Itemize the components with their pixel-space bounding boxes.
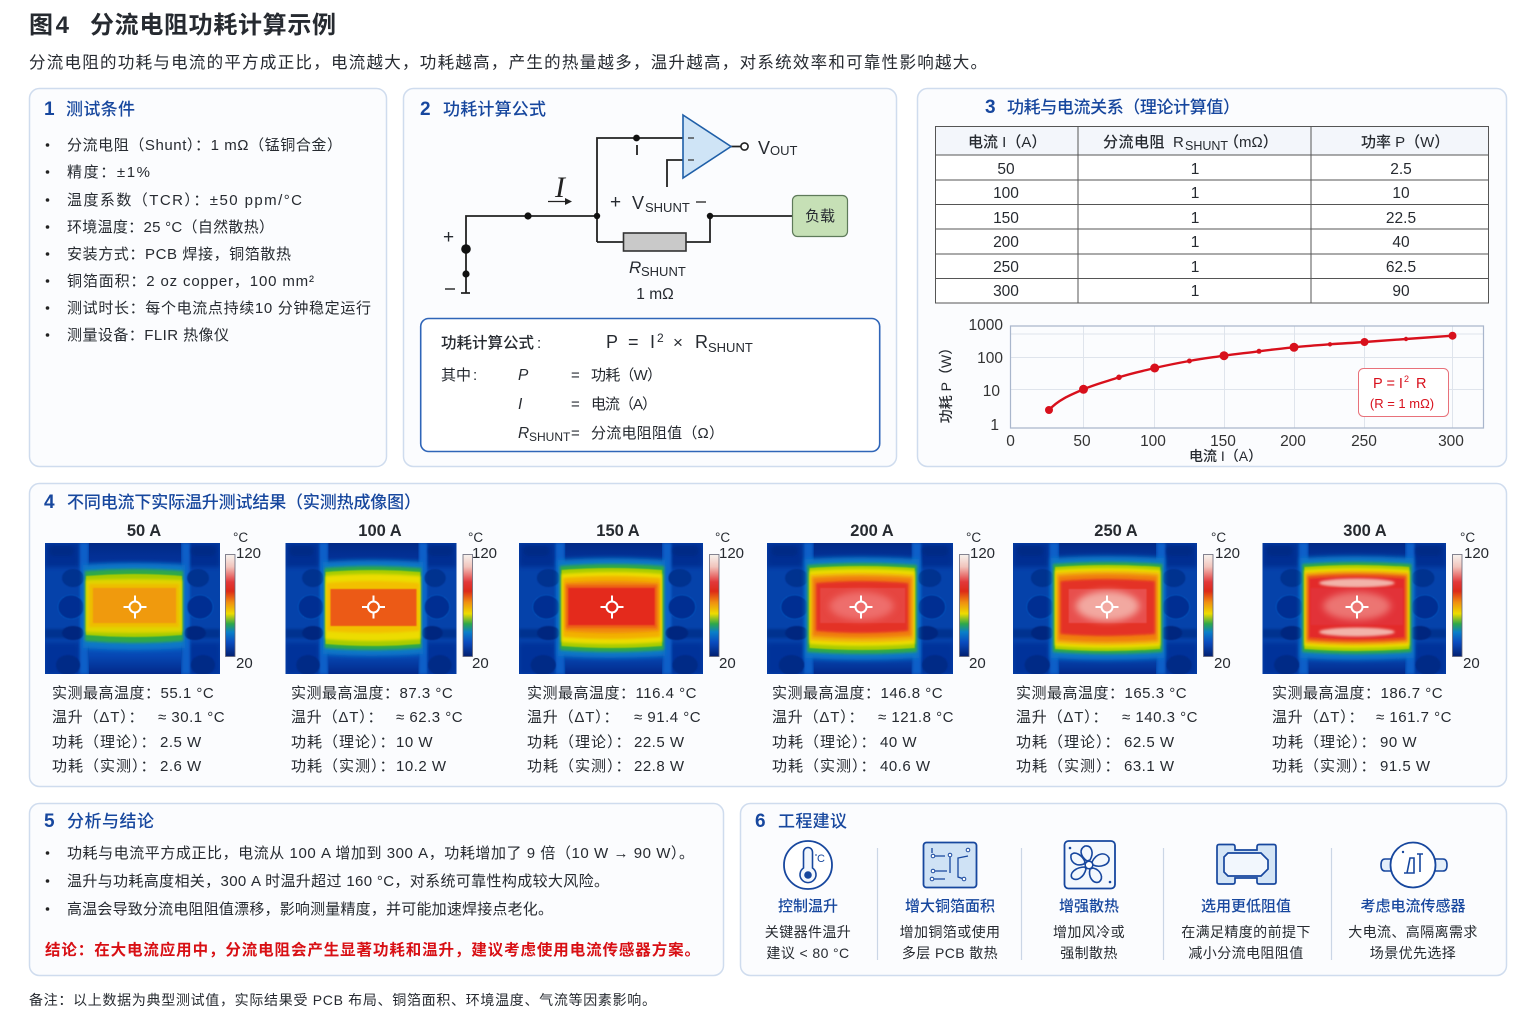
panel: thermal results xyxy=(30,484,1506,786)
voltage labels: OUT xyxy=(770,143,798,158)
title: 分流电阻功耗计算示例 xyxy=(90,12,336,39)
voltage labels: SHUNT xyxy=(645,200,690,215)
current arrow: I xyxy=(554,171,567,204)
thermal card: 200 A: 120 xyxy=(970,545,995,562)
thermal card: 150 A: 22.8 W xyxy=(634,758,685,775)
heading: analysis: 5 xyxy=(44,811,55,832)
formula box: × xyxy=(673,333,683,352)
thermal card: 200 A xyxy=(767,522,995,775)
thermal card: 100 A: 20 xyxy=(472,655,489,672)
advice: increase copper area: 增加铜箔或使用 xyxy=(900,924,1000,940)
thermal card: 150 A: ≈ 91.4 °C xyxy=(634,709,701,726)
panel: test conditions xyxy=(30,88,386,466)
thermal card: 150 A: 20 xyxy=(719,655,736,672)
data table: 1 xyxy=(1191,185,1199,202)
thermal card: 50 A: 温升（ΔT）： xyxy=(52,709,144,726)
data table: （mΩ） xyxy=(1224,134,1278,151)
thermal card: 250 A: 63.1 W xyxy=(1124,758,1175,775)
formula box: I xyxy=(650,332,655,352)
thermal card: 300 A: 温升（ΔT）： xyxy=(1272,709,1364,726)
data table: SHUNT xyxy=(1185,139,1228,153)
thermal card: 100 A: 10.2 W xyxy=(396,758,447,775)
advice: current sensor: 场景优先选择 xyxy=(1370,945,1456,961)
heading: thermal results: 4 xyxy=(44,492,55,513)
thermal card: 250 A: 功耗（理论）： xyxy=(1016,734,1120,751)
thermal card: 200 A: 20 xyxy=(969,655,986,672)
data table: 50 xyxy=(997,161,1015,178)
line chart: 0 xyxy=(1006,433,1015,450)
advice: increase copper area: 增大铜箔面积 xyxy=(905,897,995,915)
thermal card: 250 A: 250 A xyxy=(1094,522,1138,540)
formula box: SHUNT xyxy=(529,430,571,444)
advice: current sensor xyxy=(1348,842,1478,961)
data table: 150 xyxy=(993,210,1019,227)
footnote: 备注：以上数据为典型测试值，实际结果受 PCB 布局、铜箔面积、环境温度、气流等因素影响。 xyxy=(29,992,656,1008)
thermal card: 100 A: 功耗（理论）： xyxy=(291,734,395,751)
panel: power vs current xyxy=(918,88,1506,466)
thermal card: 200 A: ≈ 121.8 °C xyxy=(878,709,954,726)
formula box: 电流（A） xyxy=(591,396,657,413)
advice: enhance cooling: 强制散热 xyxy=(1060,945,1118,961)
load box xyxy=(792,196,848,236)
data table: 250 xyxy=(993,259,1019,276)
thermal card: 200 A: 200 A xyxy=(850,522,894,540)
advice: enhance cooling: 增加风冷或 xyxy=(1053,924,1125,940)
chart legend: R xyxy=(1416,376,1426,392)
thermal card: 250 A: 20 xyxy=(1214,655,1231,672)
data table: 40 xyxy=(1392,234,1410,251)
thermal card: 200 A: 温升（ΔT）： xyxy=(772,709,864,726)
thermal card: 200 A: °C xyxy=(966,530,981,545)
line chart: 200 xyxy=(1280,433,1306,450)
thermal card: 150 A: 实测最高温度：116.4 °C xyxy=(527,685,697,702)
thermal card: 250 A: 实测最高温度：165.3 °C xyxy=(1016,685,1187,702)
bullet list: test conditions: 测量设备：FLIR 热像仪 xyxy=(67,327,229,344)
thermal card: 300 A: 功耗（实测）： xyxy=(1272,758,1376,775)
thermal card: 300 A: 90 W xyxy=(1380,734,1417,751)
bullet list: test conditions: 安装方式：PCB 焊接，铜箔散热 xyxy=(67,246,291,263)
heading: thermal results: 不同电流下实际温升测试结果（实测热成像图） xyxy=(67,492,421,512)
thermal card: 250 A xyxy=(1013,522,1240,775)
advice: increase copper area xyxy=(900,842,1000,961)
data table: 1 xyxy=(1191,210,1199,227)
thermal card: 100 A: ≈ 62.3 °C xyxy=(396,709,463,726)
thermal card: 300 A: 20 xyxy=(1463,655,1480,672)
formula box: : xyxy=(537,335,541,352)
formula box: P xyxy=(606,332,618,352)
thermal card: 50 A xyxy=(45,522,261,775)
formula box: = xyxy=(571,367,580,384)
advice: current sensor: 大电流、高隔离需求 xyxy=(1348,924,1478,940)
thermal card: 200 A: 功耗（实测）： xyxy=(772,758,876,775)
heading: test conditions xyxy=(44,99,135,120)
advice: lower resistance: 选用更低阻值 xyxy=(1201,898,1291,915)
voltage labels: V xyxy=(758,138,770,158)
formula box: P xyxy=(518,367,529,384)
analysis bullets: 高温会导致分流电阻阻值漂移，影响测量精度，并可能加速焊接点老化。 xyxy=(67,901,553,918)
thermal card: 50 A: 功耗（理论）： xyxy=(52,734,156,751)
advice: control temperature: 建议 < 80 °C xyxy=(766,945,850,961)
load box: 负载 xyxy=(805,208,835,225)
thermal card: 300 A xyxy=(1262,522,1489,775)
formula box: 2 xyxy=(657,331,664,345)
formula box: 功耗计算公式 xyxy=(441,333,534,352)
chart legend: (R = 1 mΩ) xyxy=(1370,396,1434,411)
voltage labels xyxy=(443,138,798,289)
thermal card: 50 A: 实测最高温度：55.1 °C xyxy=(52,685,214,702)
analysis bullets: 温升与功耗高度相关，300 A 时温升超过 160 °C，对系统可靠性构成较大风险。 xyxy=(67,872,609,890)
advice: enhance cooling xyxy=(1053,841,1125,961)
subtitle text: 分流电阻的功耗与电流的平方成正比，电流越大，功耗越高，产生的热量越多，温升越高，对系统效率和可靠性影响越大。 xyxy=(29,53,987,72)
chart legend: 2 xyxy=(1404,374,1409,384)
thermal card: 100 A: 功耗（实测）： xyxy=(291,758,395,775)
advice: increase copper area: 多层 PCB 散热 xyxy=(902,945,998,961)
data table: 300 xyxy=(993,283,1019,300)
thermal card: 200 A: 实测最高温度：146.8 °C xyxy=(772,685,943,702)
formula box: 功耗（W） xyxy=(591,367,662,384)
advice: enhance cooling: 增强散热 xyxy=(1059,897,1119,915)
shunt labels: 1 mΩ xyxy=(636,286,674,303)
advice: lower resistance xyxy=(1181,844,1311,961)
line chart: 1000 xyxy=(969,317,1003,334)
data table: 电流 I（A） xyxy=(968,134,1046,151)
current arrow xyxy=(548,171,572,205)
panel: analysis and conclusion xyxy=(30,804,724,976)
thermal card: 100 A: 实测最高温度：87.3 °C xyxy=(291,685,453,702)
voltage labels: + xyxy=(610,192,621,213)
data table: 1 xyxy=(1191,259,1199,276)
op amp xyxy=(683,115,748,178)
advice: current sensor: 考虑电流传感器 xyxy=(1360,898,1466,915)
shunt labels: SHUNT xyxy=(641,264,686,279)
thermal card: 50 A: 120 xyxy=(236,545,261,562)
thermal card: 250 A: 温升（ΔT）： xyxy=(1016,709,1108,726)
thermal card: 100 A: 温升（ΔT）： xyxy=(291,709,383,726)
thermal card: 250 A: 120 xyxy=(1215,545,1240,562)
thermal card: 100 A: 100 A xyxy=(358,522,402,540)
thermal card: 300 A: 300 A xyxy=(1343,522,1387,540)
heading: test conditions: 1 xyxy=(44,99,55,120)
bullet list: test conditions: 铜箔面积：2 oz copper，100 mm² xyxy=(67,273,314,290)
heading: advice: 工程建议 xyxy=(778,812,847,831)
data table: 90 xyxy=(1392,283,1410,300)
line chart: 10 xyxy=(983,383,1000,400)
bullet list: test conditions xyxy=(46,137,371,344)
formula box: R xyxy=(695,332,708,352)
bullet list: test conditions: 环境温度：25 °C（自然散热） xyxy=(67,218,274,236)
voltage labels: + xyxy=(443,227,454,248)
line chart: 电流 I（A） xyxy=(1189,448,1262,464)
thermal card: 50 A: 20 xyxy=(236,655,253,672)
analysis bullets xyxy=(46,845,694,918)
icon: PCB copper xyxy=(924,842,976,888)
line chart xyxy=(938,317,1484,464)
thermal card: 300 A: 91.5 W xyxy=(1380,758,1431,775)
data table: 100 xyxy=(993,185,1019,202)
icon: fan xyxy=(1064,841,1115,888)
bullet list: test conditions: 测试时长：每个电流点持续10 分钟稳定运行 xyxy=(67,300,371,317)
thermal card: 100 A: °C xyxy=(468,530,483,545)
thermal card: 50 A: 2.6 W xyxy=(160,758,202,775)
thermal card: 150 A: 功耗（理论）： xyxy=(527,734,631,751)
thermal card: 250 A: 功耗（实测）： xyxy=(1016,758,1120,775)
thermal card: 150 A: 温升（ΔT）： xyxy=(527,709,619,726)
thermal card: 250 A: ≈ 140.3 °C xyxy=(1122,709,1198,726)
line chart: 1 xyxy=(990,417,999,434)
icon: shunt resistor xyxy=(1217,844,1276,884)
formula box: : xyxy=(473,367,477,384)
thermal card: 200 A: 40.6 W xyxy=(880,758,931,775)
data table: 10 xyxy=(1392,185,1410,202)
thermal card: 150 A: 150 A xyxy=(596,522,640,540)
conclusion: 结论：在大电流应用中，分流电阻会产生显著功耗和温升，建议考虑使用电流传感器方案。 xyxy=(45,940,700,959)
advice: control temperature: 控制温升 xyxy=(778,898,838,915)
advice: control temperature xyxy=(765,841,851,961)
thermal card: 300 A: 功耗（理论）： xyxy=(1272,734,1376,751)
thermal card: 300 A: ≈ 161.7 °C xyxy=(1376,709,1452,726)
formula box: R xyxy=(518,425,529,442)
line chart: 300 xyxy=(1438,433,1464,450)
thermal card: 150 A xyxy=(519,522,744,775)
thermal card: 200 A: 功耗（理论）： xyxy=(772,734,876,751)
formula box: 分流电阻阻值（Ω） xyxy=(591,425,724,442)
thermal card: 100 A: 10 W xyxy=(396,734,433,751)
heading: power formula: 功耗计算公式 xyxy=(443,100,546,119)
shunt labels xyxy=(629,258,686,303)
panel: power formula xyxy=(404,88,896,466)
formula box xyxy=(421,318,880,452)
formula box: = xyxy=(571,425,580,442)
line chart: 50 xyxy=(1073,433,1091,450)
thermal card: 300 A: °C xyxy=(1460,530,1475,545)
chart legend xyxy=(1358,368,1448,416)
heading: advice xyxy=(755,811,847,832)
formula box: I xyxy=(518,396,523,413)
icon: thermometer: C xyxy=(817,853,825,865)
data table: R xyxy=(1173,134,1184,151)
thermal card: 300 A: 实测最高温度：186.7 °C xyxy=(1272,685,1443,702)
title: 图4 xyxy=(29,12,70,39)
chart legend: P = I xyxy=(1373,376,1403,392)
thermal card: 100 A: 120 xyxy=(472,545,497,562)
formula box: = xyxy=(628,332,639,352)
bullet list: test conditions: 温度系数（TCR）：±50 ppm/°C xyxy=(67,192,302,209)
shunt labels: R xyxy=(629,258,641,277)
thermal card: 150 A: °C xyxy=(715,530,730,545)
heading: advice: 6 xyxy=(755,811,766,832)
bullet list: test conditions: 精度：±1% xyxy=(67,164,150,181)
data table: 2.5 xyxy=(1390,161,1412,178)
resistor xyxy=(624,233,686,251)
thermal card: 300 A: 120 xyxy=(1464,545,1489,562)
thermal card: 100 A xyxy=(286,522,497,775)
icon: current sensor xyxy=(1381,842,1447,888)
thermal card: 50 A: 功耗（实测）： xyxy=(52,758,156,775)
line chart: 100 xyxy=(977,350,1003,367)
line chart: 150 xyxy=(1210,433,1236,450)
circuit diagram xyxy=(443,115,848,303)
heading: power vs current: 功耗与电流关系（理论计算值） xyxy=(1007,98,1240,117)
line chart: 100 xyxy=(1140,433,1166,450)
advice: lower resistance: 减小分流电阻阻值 xyxy=(1188,945,1304,961)
data table: 200 xyxy=(993,234,1019,251)
thermal card: 150 A: 功耗（实测）： xyxy=(527,758,631,775)
advice: control temperature: 关键器件温升 xyxy=(765,924,851,940)
formula box: = xyxy=(571,396,580,413)
thermal card: 200 A: 40 W xyxy=(880,734,917,751)
data table: 1 xyxy=(1191,283,1199,300)
data table: 1 xyxy=(1191,234,1199,251)
line chart: 250 xyxy=(1351,433,1377,450)
line chart: 功耗 P（W） xyxy=(938,341,954,423)
heading: analysis: 分析与结论 xyxy=(67,812,154,831)
data table: 功率 P（W） xyxy=(1361,134,1449,151)
thermal card: 50 A: 50 A xyxy=(127,522,161,540)
formula box: 其中 xyxy=(441,367,471,384)
data table: 62.5 xyxy=(1386,259,1416,276)
voltage labels: V xyxy=(632,193,644,213)
data table: 1 xyxy=(1191,161,1199,178)
panel: engineering advice xyxy=(740,804,1506,976)
heading: power vs current: 3 xyxy=(985,97,996,118)
thermal card: 150 A: 22.5 W xyxy=(634,734,685,751)
thermal card: 150 A: 120 xyxy=(719,545,744,562)
thermal card: 50 A: 2.5 W xyxy=(160,734,202,751)
thermal card: 250 A: 62.5 W xyxy=(1124,734,1175,751)
thermal card: 250 A: °C xyxy=(1211,530,1226,545)
thermal card: 50 A: ≈ 30.1 °C xyxy=(158,709,225,726)
heading: power formula: 2 xyxy=(420,99,431,120)
advice: lower resistance: 在满足精度的前提下 xyxy=(1181,924,1311,940)
bullet list: test conditions: 分流电阻（Shunt）：1 mΩ（锰铜合金） xyxy=(67,137,342,154)
data table: 22.5 xyxy=(1386,210,1416,227)
data table xyxy=(936,126,1488,303)
analysis bullets: 功耗与电流平方成正比，电流从 100 A 增加到 300 A，功耗增加了 9 倍（10 W → 90 W）。 xyxy=(67,845,694,862)
thermal card: 50 A: °C xyxy=(233,530,248,545)
heading: test conditions: 测试条件 xyxy=(66,100,135,119)
data table: 分流电阻 xyxy=(1103,134,1165,151)
formula box: SHUNT xyxy=(708,340,753,355)
